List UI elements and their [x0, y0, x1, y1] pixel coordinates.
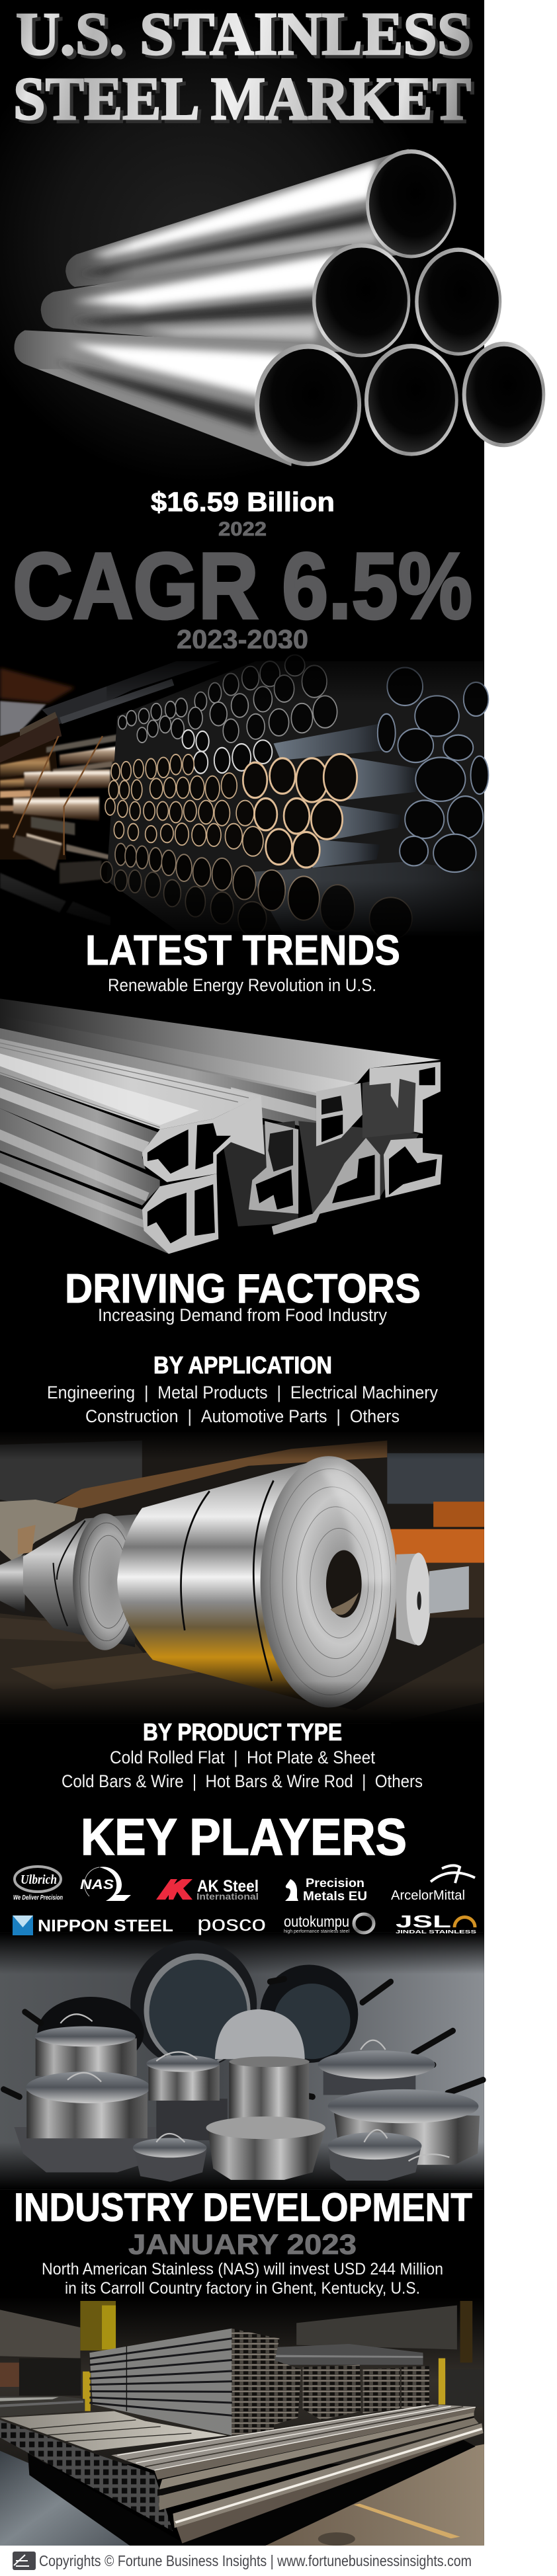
- profile end face: upper left: [142, 1096, 265, 1182]
- logo: Outokumpu: [284, 1913, 374, 1934]
- logo: JSL: JSL: [396, 1912, 451, 1931]
- profile end face: far right: [369, 1062, 441, 1134]
- illustration: stacked steel pipes: [11, 149, 545, 466]
- pan: back left: [37, 1997, 144, 2068]
- coil face rings: left: [80, 1523, 133, 1641]
- lid: large dome: [215, 2009, 305, 2059]
- beam 3: [159, 2418, 479, 2511]
- heading: driving factors: DRIVING FACTORS: [65, 1266, 421, 1312]
- hole: [419, 1067, 435, 1085]
- logo: JSL: JINDAL STAINLESS: [396, 1930, 477, 1935]
- straps: [13, 736, 103, 855]
- pipe: middle: [39, 244, 352, 352]
- pot: centre dark: [156, 2099, 228, 2140]
- text: development line 1: North American Stainless (NAS) will invest USD 244 Million: [42, 2260, 443, 2278]
- right tube bodies: [249, 723, 483, 936]
- profile end face: lower right: [384, 1138, 443, 1198]
- pipe end: bottom centre: [364, 344, 458, 456]
- text: applications line 1: Engineering | Metal Products | Electrical Machinery: [47, 1383, 438, 1402]
- beam 2: [159, 2412, 474, 2489]
- stack seam: [126, 2346, 128, 2411]
- lidded pan: right top: [318, 2050, 435, 2095]
- hole: [321, 1096, 343, 1115]
- profile end face: lower left: [142, 1174, 218, 1254]
- hole: [194, 1184, 215, 1236]
- footer logo: [13, 2552, 36, 2570]
- pipe: bottom: [11, 327, 302, 466]
- hole: [148, 1129, 189, 1174]
- bar ends block: [0, 2420, 173, 2531]
- footer text: Copyrights © Fortune Business Insights | www.fortunebusinessinsights.com: [39, 2552, 472, 2569]
- logo: NAS: NAS: [80, 1877, 114, 1892]
- yellow pillar base: [83, 2372, 91, 2411]
- hole: [148, 1193, 187, 1243]
- dark top gaps: [31, 2420, 191, 2442]
- top fade: [0, 1430, 484, 1459]
- illustration: pile of steel tubes: [0, 649, 488, 940]
- pan: back centre: [130, 1940, 257, 2068]
- lower tube rings in shadow: [115, 844, 320, 920]
- flat sheets back: [275, 2344, 423, 2365]
- left shelf: [19, 2358, 81, 2395]
- black under platform: [28, 2440, 476, 2546]
- hole: [389, 1147, 437, 1195]
- logo: Precision Metals EU: Metals EU: [303, 1890, 367, 1904]
- orange machinery: [391, 1529, 484, 1563]
- logo: Ulbrich: Ulbrich: [21, 1872, 57, 1887]
- hole: [332, 1154, 375, 1203]
- text: development line 2: in its Carroll Country factory in Ghent, Kentucky, U.S.: [65, 2279, 420, 2298]
- logo: Nippon Steel: NIPPON STEEL: [38, 1917, 173, 1935]
- stat: forecast period: 2023-2030: [177, 624, 308, 655]
- illustration: steel bars in warehouse: [0, 2296, 484, 2546]
- text: product types line 1: Cold Rolled Flat | Hot Plate & Sheet: [110, 1748, 375, 1767]
- fade to black: [0, 881, 484, 940]
- lid knob strokes: [60, 2014, 449, 2161]
- front profile top surfaces: [0, 1039, 261, 1129]
- bars platform top left: [0, 2411, 227, 2451]
- warm medium tube rings: [105, 754, 263, 856]
- wall light patches: [0, 2310, 80, 2358]
- right back wall: [387, 1453, 484, 1504]
- coil: far left: [0, 1554, 25, 1613]
- coil: right small: [396, 1554, 428, 1645]
- illustration: steel coils in factory: [0, 1430, 484, 1723]
- background glow behind pipes: [0, 0, 484, 516]
- illustration: warm lit tubes, left of the pile: [0, 661, 220, 926]
- bowl: front centre: [206, 2116, 325, 2180]
- coil face: left: [73, 1513, 137, 1650]
- warehouse wall: [0, 2296, 484, 2464]
- pot: front small: [133, 2138, 207, 2182]
- pipe: top: [64, 149, 419, 291]
- factory floor: [0, 1613, 484, 1723]
- logo: Ulbrich: [13, 1867, 63, 1902]
- profile end face: stepped: [272, 1138, 380, 1235]
- grey light patch: [0, 701, 46, 736]
- logo: AK Steel: International: [196, 1891, 259, 1902]
- right shelf pipes: [447, 2369, 484, 2407]
- logo: AK Steel: AK Steel: [197, 1877, 259, 1896]
- floor stain: [318, 2532, 355, 2546]
- main stack side: [89, 2329, 232, 2435]
- logo: ArcelorMittal: [391, 1865, 475, 1903]
- left shelf boxes: [0, 2362, 19, 2387]
- text: applications line 2: Construction | Automotive Parts | Others: [85, 1406, 400, 1426]
- logo: ArcelorMittal: ArcelorMittal: [391, 1888, 465, 1903]
- hole: [195, 1123, 231, 1170]
- factory background: [0, 1432, 484, 1723]
- stat: CAGR: CAGR 6.5%: [13, 534, 472, 639]
- hole: [256, 1170, 293, 1209]
- logo: Ulbrich: We Deliver Precision: [13, 1894, 63, 1902]
- beam 4 highlight: [175, 2428, 482, 2524]
- logo: Outokumpu: outokumpu: [284, 1913, 349, 1930]
- pipe end: middle right: [415, 248, 501, 356]
- main stack side stripes: [89, 2339, 232, 2415]
- saute pan: right: [328, 2089, 480, 2165]
- beam 1 side: [154, 2407, 476, 2479]
- hole: [268, 1129, 293, 1172]
- beam 1 top: [111, 2405, 476, 2471]
- beam highlights: [117, 2405, 476, 2470]
- cookware backdrop: [0, 1933, 484, 2189]
- small stacks back: [302, 2365, 429, 2420]
- back profile surfaces: [0, 998, 441, 1100]
- text: development date: JANUARY 2023: [128, 2229, 357, 2261]
- pot: front right: [328, 2132, 421, 2181]
- factory back wall: [0, 1441, 142, 1508]
- coil rings: [270, 1469, 391, 1695]
- white lit tube rings: [182, 730, 272, 774]
- illustration: steel profiles: [0, 998, 443, 1254]
- footer: [13, 2552, 472, 2570]
- factory beam: [46, 1441, 387, 1508]
- yellow pillar: [80, 2301, 116, 2351]
- upper grey tube rings: [118, 655, 337, 743]
- yellow floor line: [353, 2504, 460, 2538]
- left bars: [0, 2396, 85, 2417]
- yellow post right: [439, 2358, 445, 2405]
- heading: by application: BY APPLICATION: [153, 1351, 332, 1379]
- profile end face: centre: [249, 1121, 298, 1214]
- coil: main face: [261, 1456, 397, 1707]
- stat: base year: 2022: [218, 518, 267, 540]
- stat: market value: $16.59 Billion: [151, 487, 335, 517]
- coil: right far: [429, 1566, 469, 1613]
- floor left: [0, 2451, 130, 2546]
- right blue-grey tube rings: [378, 668, 488, 872]
- logo: posco: posco: [197, 1912, 266, 1935]
- pan: back right: [260, 1964, 358, 2063]
- logo: Outokumpu: high performance stainless steel: [284, 1929, 349, 1934]
- pipe end: bottom right: [462, 342, 545, 447]
- coil highlight: [320, 1466, 391, 1584]
- pot: centre small: [146, 2055, 220, 2101]
- pipe end: bottom front: [255, 344, 361, 466]
- text: driving factor: Increasing Demand from Food Industry: [98, 1305, 387, 1325]
- dark right post: [460, 2301, 472, 2362]
- coil: main body: [117, 1457, 330, 1707]
- handles: [3, 1979, 483, 2097]
- pile shadow body: [107, 661, 484, 931]
- heading: by product type: BY PRODUCT TYPE: [143, 1718, 342, 1746]
- logo: Precision Metals EU: [285, 1876, 367, 1904]
- beam 5: [176, 2433, 484, 2544]
- pot: tall centre: [229, 2056, 310, 2121]
- main stack end faces: [227, 2329, 301, 2435]
- illustration: cookware: [0, 1933, 484, 2189]
- warm tube strips: [0, 732, 134, 926]
- coil bands: [181, 1480, 273, 1681]
- front profile side surfaces: [0, 1074, 161, 1170]
- left sacks: [0, 1500, 78, 1563]
- logo: JSL: [396, 1912, 477, 1935]
- coil: left body: [23, 1514, 137, 1647]
- beam 4: [173, 2423, 484, 2528]
- text: latest trend: Renewable Energy Revolution in U.S.: [108, 975, 376, 995]
- coil hole: [326, 1550, 362, 1618]
- profile end face: top right box: [316, 1083, 363, 1147]
- bottom fade: [0, 1681, 484, 1723]
- right profile inner surfaces: [220, 1121, 298, 1227]
- pipe end: middle: [312, 243, 410, 357]
- title: [13, 0, 471, 132]
- pan: lower left: [14, 2127, 156, 2173]
- title line 2: STEEL MARKET: [13, 65, 471, 132]
- heading: industry development: INDUSTRY DEVELOPMENT: [14, 2185, 472, 2230]
- floor right: [265, 2444, 484, 2546]
- warm large tube rings: [243, 754, 357, 867]
- heading: latest trends: LATEST TRENDS: [85, 926, 400, 974]
- upper dark tubes: [0, 661, 220, 762]
- pot: top left: [35, 2027, 137, 2076]
- beam gap: [157, 2415, 474, 2496]
- title line 1: U.S. STAINLESS: [16, 0, 471, 67]
- warm haze: [0, 668, 75, 703]
- coil: left bands: [54, 1521, 85, 1626]
- logo: AK Steel: [156, 1877, 259, 1902]
- logo: Precision Metals EU: Precision: [306, 1876, 364, 1890]
- yellow pillar highlight: [102, 2306, 116, 2349]
- hole: [321, 1115, 343, 1142]
- heading: key players: KEY PLAYERS: [81, 1808, 407, 1866]
- pot: left: [26, 2072, 150, 2138]
- text: product types line 2: Cold Bars & Wire | Hot Bars & Wire Rod | Others: [62, 1771, 423, 1791]
- pipe end: top: [366, 149, 456, 258]
- logo: NAS: [80, 1867, 131, 1901]
